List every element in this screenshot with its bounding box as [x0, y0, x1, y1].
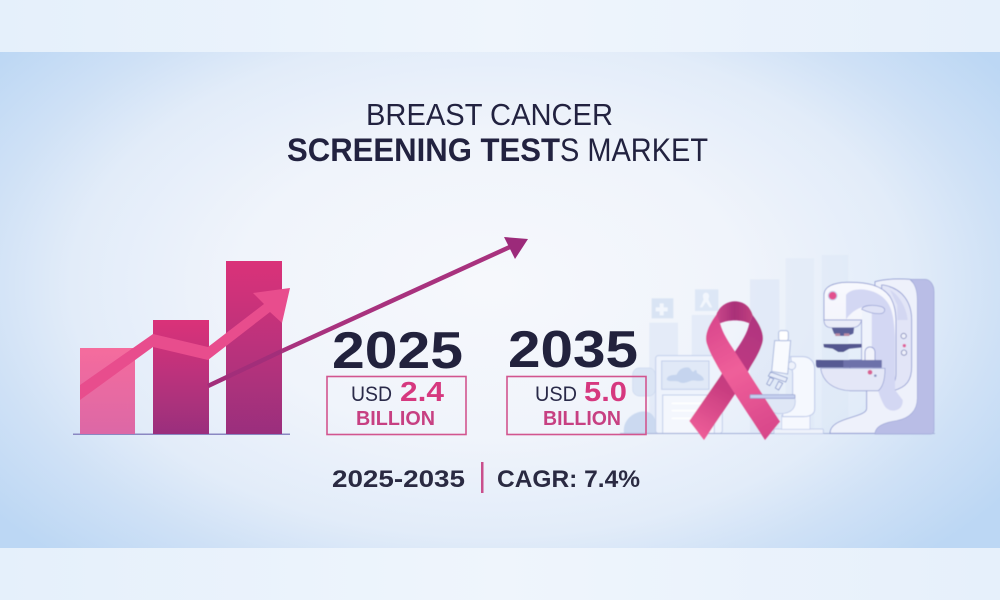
title line 1: BREAST CANCER [366, 97, 613, 132]
document text panel [663, 395, 714, 433]
usd label: USD [535, 383, 577, 406]
billion label: BILLION [356, 408, 435, 430]
pink indicator [828, 291, 837, 300]
box 2035 [507, 376, 646, 434]
tray controls [868, 370, 872, 375]
ribbon front strand [706, 313, 780, 440]
background bottom band [0, 548, 1000, 600]
long growth arrow [208, 237, 528, 386]
ribbon top loop [717, 301, 753, 323]
title line 2 regular: S MARKET [560, 132, 708, 168]
microscope base [774, 429, 823, 434]
cagr row [332, 462, 640, 493]
lower plate [816, 360, 882, 368]
cagr value: CAGR: 7.4% [497, 466, 640, 493]
usd label: USD [351, 383, 392, 406]
faded ribbon tile [695, 289, 718, 311]
head shade [846, 289, 903, 411]
background top band [0, 0, 1000, 52]
machine arm [882, 285, 912, 391]
billion label: BILLION [543, 408, 621, 430]
arm handle loop [865, 347, 875, 360]
microscope arm [783, 357, 815, 417]
plate highlight [843, 360, 882, 368]
microscope tube [772, 341, 791, 374]
detector tray [821, 368, 885, 391]
column dark side [875, 279, 934, 434]
tube head [824, 320, 862, 328]
year 2025: 2025 [332, 322, 463, 380]
microscope [762, 331, 823, 434]
machine head [824, 282, 896, 391]
bar medium [153, 320, 209, 434]
lens accents [835, 333, 849, 336]
side controls [901, 333, 907, 355]
upper paddle [823, 344, 862, 352]
microscope foot [782, 415, 810, 429]
value 2025 [327, 322, 466, 434]
microscope objectives [767, 372, 787, 390]
amount 2.4: 2.4 [400, 376, 444, 407]
year 2035: 2035 [508, 321, 638, 379]
document image [662, 361, 709, 389]
report document [656, 356, 722, 433]
machine rear column [830, 279, 920, 433]
box 2025 [327, 376, 466, 434]
mammography machine [816, 279, 934, 434]
bar chart [80, 261, 282, 434]
microscope eyepiece [779, 331, 788, 341]
title [287, 97, 708, 168]
faded cross tile [652, 298, 673, 318]
document map [667, 367, 704, 383]
divider [481, 462, 484, 493]
medical illustration [620, 255, 935, 440]
bar large [226, 261, 282, 434]
bar small [80, 348, 135, 434]
compression handle [862, 305, 885, 314]
pink trend arrow [80, 288, 290, 400]
awareness ribbon [689, 301, 780, 440]
amount 5.0: 5.0 [584, 376, 627, 407]
tube lens [832, 328, 854, 336]
illustration baseline [620, 433, 935, 434]
chart baseline [73, 434, 290, 435]
ribbon back strand [689, 315, 763, 440]
microscope knob [788, 362, 796, 370]
faded blobs [624, 368, 657, 433]
faded background bars [649, 255, 848, 433]
period: 2025-2035 [332, 466, 465, 493]
pillar light strip [862, 312, 872, 360]
microscope dish [762, 398, 795, 414]
microscope stage [750, 395, 795, 398]
arm inner shade [890, 290, 908, 320]
value 2035 [507, 321, 646, 434]
title line 2 bold: SCREENING TEST [287, 132, 560, 168]
document lines [672, 403, 702, 418]
